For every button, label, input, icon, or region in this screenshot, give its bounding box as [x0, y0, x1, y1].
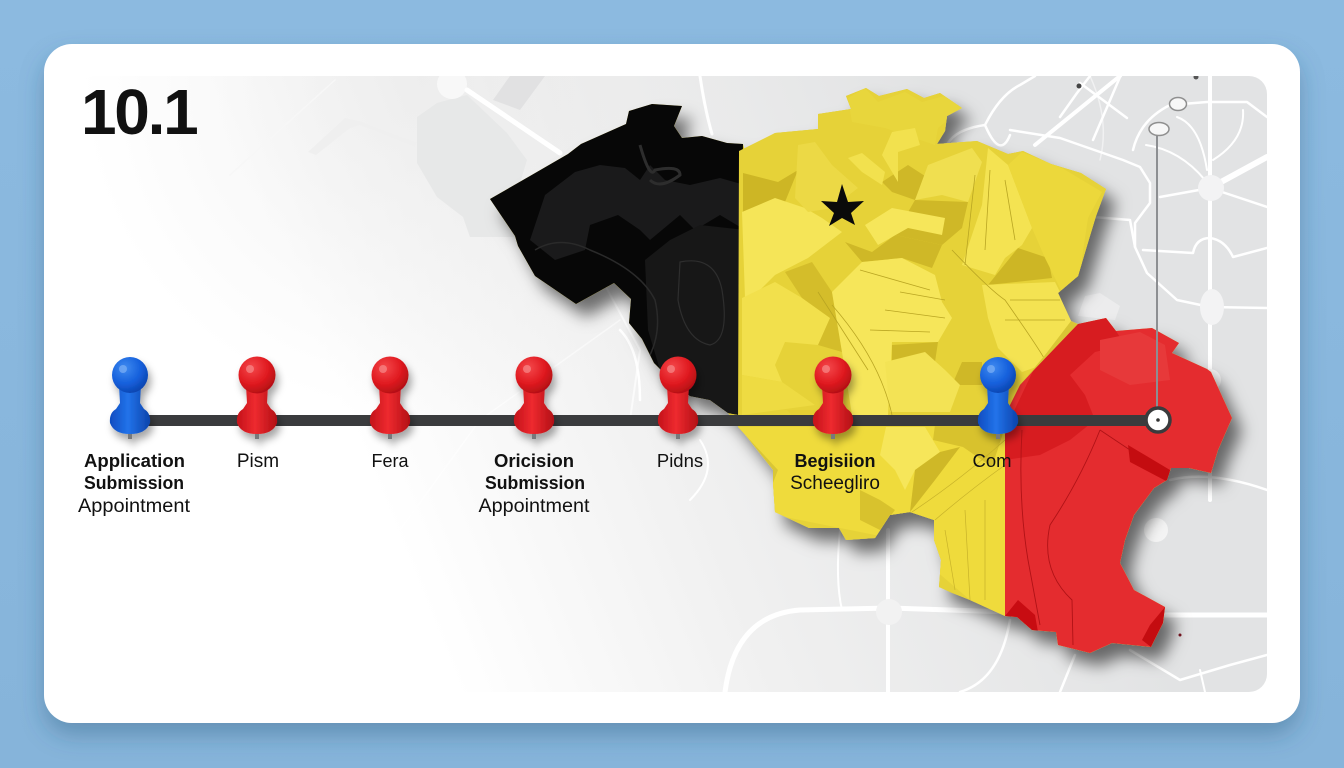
label: Oricision Submission Appointment: Oricision	[494, 451, 574, 471]
timeline bar	[130, 415, 1158, 426]
label: Application Submission Appointment: Appointment	[78, 496, 191, 517]
label: Pidns: Pidns	[657, 450, 703, 471]
pin 6: red	[813, 356, 853, 439]
pin 1: blue	[110, 357, 150, 439]
label: Application Submission Appointment	[78, 451, 191, 517]
black section	[490, 104, 743, 415]
pin 5: red	[658, 356, 698, 439]
black star marker	[821, 184, 864, 226]
label: Fera: Fera	[371, 451, 409, 471]
background street map	[243, 76, 1267, 692]
map shadow	[490, 88, 1232, 653]
label: Oricision Submission Appointment	[478, 451, 590, 517]
timeline end node	[1146, 408, 1170, 432]
label: Begisiion Scheegliro	[790, 451, 880, 494]
pin 2: red	[237, 356, 277, 439]
vertical leader line with pin heads	[1149, 98, 1186, 410]
pin 3: red	[370, 356, 410, 439]
map: Belgium-flag-coloured country	[480, 85, 1240, 660]
pin 4: red	[514, 356, 554, 439]
label: Oricision Submission Appointment: Appointment	[478, 496, 590, 517]
red section	[1000, 310, 1240, 660]
label: Com: Com	[972, 450, 1012, 471]
label: Begisiion Scheegliro: Scheegliro	[790, 473, 880, 494]
label: Begisiion Scheegliro: Begisiion	[794, 451, 876, 471]
title number: 10.1	[81, 76, 197, 148]
label: Application Submission Appointment: Application	[84, 451, 185, 471]
yellow section	[735, 85, 1115, 625]
pin 7: blue	[978, 357, 1018, 439]
label: Pism: Pism	[237, 451, 279, 472]
label: Application Submission Appointment: Submission	[84, 473, 184, 493]
label: Oricision Submission Appointment: Submission	[485, 473, 585, 493]
